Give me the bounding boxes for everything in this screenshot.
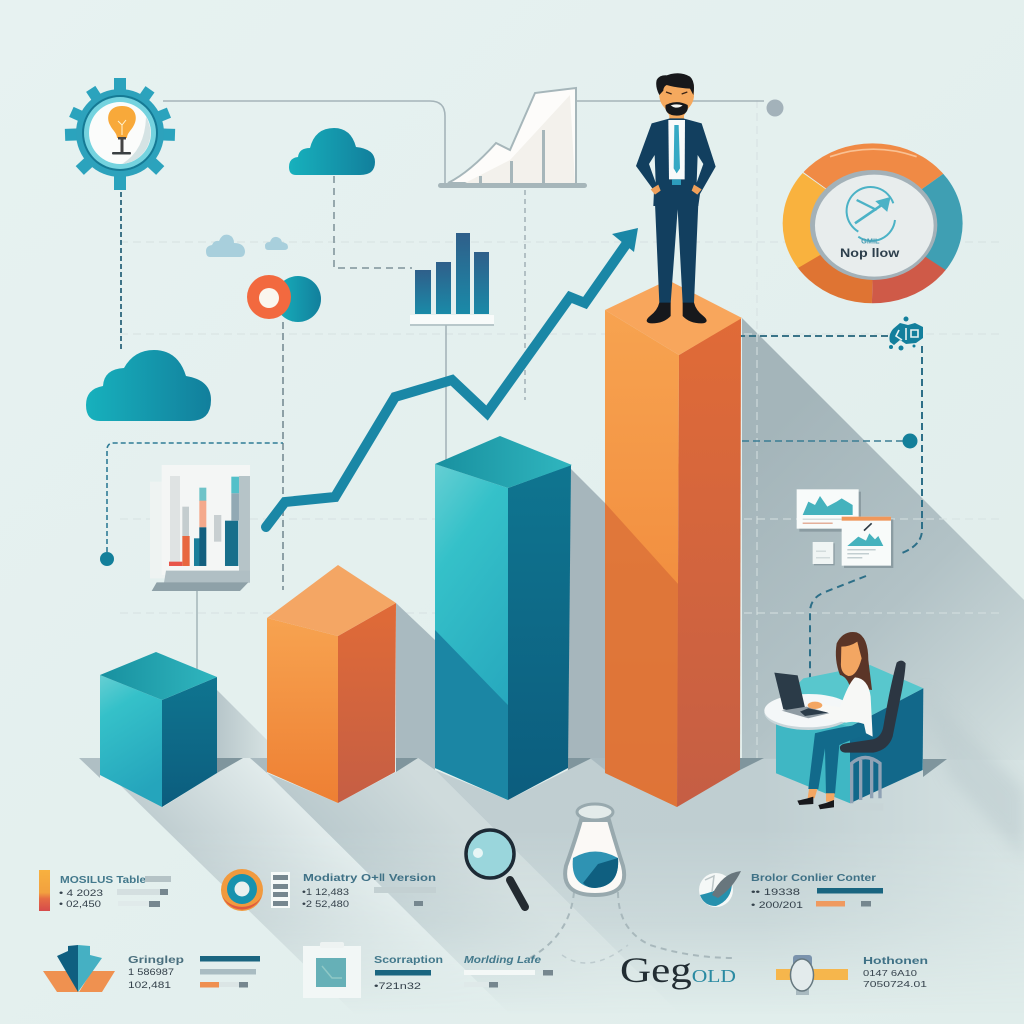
icon: small circuit glyph [889,316,923,350]
man neck [669,110,684,123]
icon: small clouds [206,235,288,257]
flask [565,804,624,895]
legend: Modiatry Version: Modiatry O+‖ Version [303,872,436,884]
bar 4 [605,280,742,807]
bar 2 [267,565,396,803]
guide grid lines [120,100,1000,760]
man eyes [666,92,687,94]
icon: large cloud [86,350,211,421]
woman legs [808,724,866,794]
legend: Brolor Center: • 200/201 [751,900,803,910]
legend: Modiatry Version: •2 52,480 [302,899,349,909]
legend: Gringlep: 1 586987 [128,967,174,977]
round table [764,694,852,730]
donut badge [782,143,963,304]
bar 2 to 3 shadow [396,603,435,758]
window two [842,517,893,568]
legend: Gringlep: Gringlep [128,954,184,966]
icon: gear with light bulb [65,78,175,190]
man hands [651,185,702,195]
woman face [841,642,862,676]
chair [840,661,906,753]
connector dots [100,100,918,566]
legend: Brolor Center: Brolor Conlier Conter [751,872,876,884]
legend: Mosilus Table: • 02,450 [59,899,101,909]
man legs [655,203,698,303]
man tie [674,125,680,173]
legend: Gringlep [43,945,260,992]
bar 3 [435,436,572,800]
desk cube [776,665,923,803]
legend: Hothonen: 7050724.01 [863,979,927,989]
mountain line chart [438,88,587,188]
man jacket [636,118,716,206]
legend: Modiatry Version [221,869,436,911]
woman at desk [764,632,923,811]
bar 1 [100,652,217,807]
legend: Gringlep: 102,481 [128,980,171,990]
legend: Brolor Center: •• 19338 [751,887,800,897]
woman torso [811,677,873,737]
floor patch [833,803,883,811]
legend: Morlding Lafe: Morlding Lafe [464,955,542,966]
legend: Scorraption [303,942,443,998]
legend: Mosilus Table: MOSILUS Table [60,874,146,886]
businessman standing on bar [636,73,716,323]
woman ankles [808,789,835,802]
man belt [672,179,681,185]
icon: medium cloud [289,128,375,175]
window one [797,489,861,532]
man shirt [668,120,685,179]
legend: Scorraption: Scorraption [374,955,443,966]
legend: Brolor Center [699,871,883,910]
legend: Morlding Lafe [464,955,553,988]
woman hair [836,632,872,690]
bar 3 to 4 shadow [568,466,605,758]
bar 1 to 2 shadow [217,690,267,758]
badge small text: GMIL [861,236,880,245]
man shoes [647,303,707,323]
icon: overlapping circles [247,275,321,322]
report windows [797,489,893,568]
laptop [774,673,829,718]
magnifying glass [466,830,525,907]
floor shadows at bar bases [79,758,947,778]
stool [852,757,880,803]
man hair [656,73,694,95]
legend: Scorraption: •721n32 [374,981,421,991]
small bar chart [410,233,494,325]
logo: Cegold: Geg OLD [620,950,736,990]
long diagonal shadows [120,318,1024,1024]
legend: Mosilus Table [39,870,171,911]
legend: Modiatry Version: •1 12,483 [302,887,349,897]
icon: report panel with bars [150,465,250,591]
man face [659,85,694,117]
rising trend arrow [266,228,638,527]
connector lines [107,101,922,963]
woman shoes [797,797,834,809]
badge emblem [847,187,895,241]
legend: Hothonen: Hothonen [863,955,928,967]
man beard [665,102,688,116]
legend: Mosilus Table: • 4 2023 [59,888,103,898]
woman hand [808,702,822,709]
badge label: Nop llow [840,246,900,260]
legend: Hothonen [776,955,928,995]
man arm gaps [649,155,703,183]
legend: Hothonen: 0147 6A10 [863,968,917,978]
window three [813,542,835,565]
